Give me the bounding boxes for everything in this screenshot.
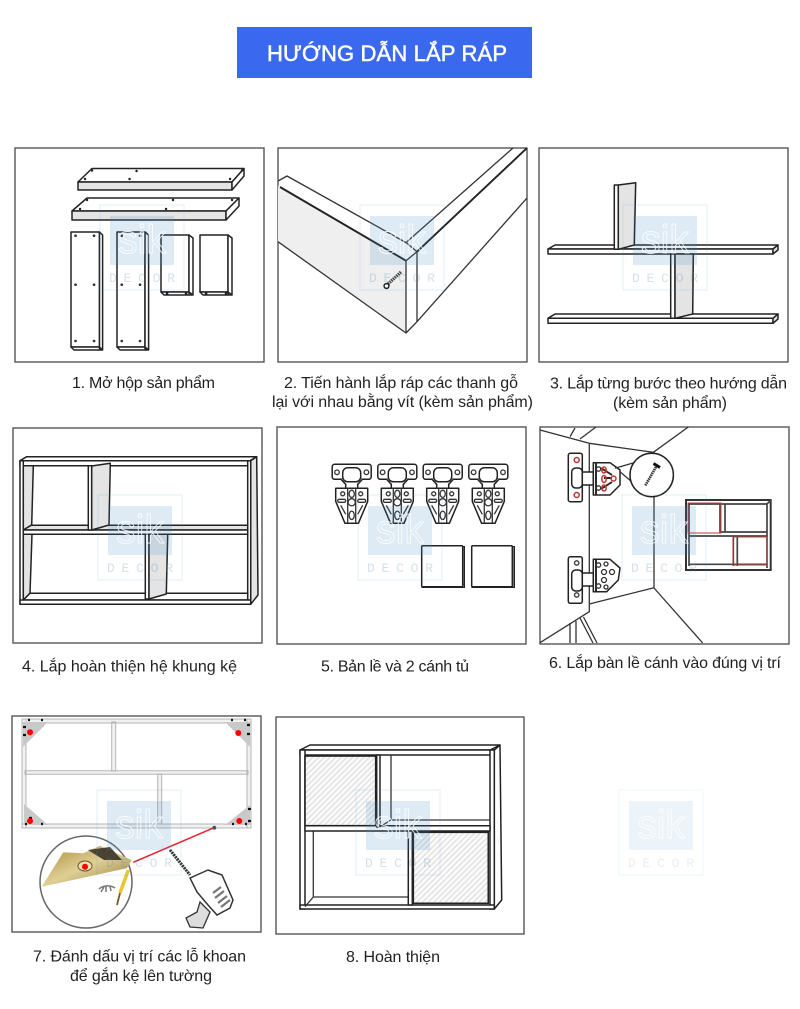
watermark <box>97 790 181 875</box>
watermark: sik <box>378 218 427 262</box>
lower upright <box>671 254 693 318</box>
caption 3: (kèm sản phẩm) <box>613 394 727 412</box>
faint watermark in empty area <box>619 790 703 875</box>
watermark <box>358 495 442 580</box>
watermark: sik <box>116 508 165 552</box>
red marks <box>27 729 242 824</box>
lower divider <box>145 534 168 599</box>
watermark <box>100 205 184 290</box>
faint watermark in empty area: DECOR <box>628 856 694 871</box>
watermark: DECOR <box>109 271 175 286</box>
watermark <box>356 790 440 875</box>
watermark: DECOR <box>367 561 433 576</box>
upper shelf <box>548 245 778 254</box>
watermark: DECOR <box>369 271 435 286</box>
panel: step 2 screw joint <box>278 148 527 362</box>
magnifier with screw <box>615 453 673 497</box>
room lines <box>540 427 703 643</box>
panel: step 8 finished <box>276 717 524 934</box>
watermark: sik <box>376 508 425 552</box>
back dividers <box>305 755 490 905</box>
caption 7: để gắn kệ lên tường <box>70 966 212 985</box>
red guide line <box>133 826 216 862</box>
caption 1: 1. Mở hộp sản phẩm <box>72 374 215 392</box>
panel: step 3 shelves <box>539 148 788 362</box>
middle shelf <box>23 525 248 534</box>
doors <box>422 546 514 588</box>
small shelf <box>686 500 771 570</box>
caption 4: 4. Lắp hoàn thiện hệ khung kệ <box>22 657 237 676</box>
panel: step 5 hinges and doors <box>277 427 526 644</box>
top plank <box>78 168 244 190</box>
outer frame <box>20 457 258 604</box>
caption 8: 8. Hoàn thiện <box>346 949 440 966</box>
finished frame <box>300 745 502 909</box>
upper upright <box>614 183 636 249</box>
panel: step 4 frame <box>13 428 262 643</box>
watermark: sik <box>640 508 689 552</box>
lower hinge <box>568 557 620 603</box>
panel: step 1 open box <box>15 148 264 362</box>
drill <box>170 850 233 928</box>
hinges <box>332 464 508 523</box>
watermark: DECOR <box>365 856 431 871</box>
caption 7: 7. Đánh dấu vị trí các lỗ khoan <box>33 947 246 966</box>
caption 3: 3. Lắp từng bước theo hướng dẫn <box>550 374 787 392</box>
watermark: sik <box>115 803 164 847</box>
watermark <box>360 205 444 290</box>
caption 2: 2. Tiến hành lắp ráp các thanh gỗ <box>284 373 518 392</box>
watermark <box>623 205 707 290</box>
watermark: DECOR <box>107 561 173 576</box>
faint watermark in empty area: sik <box>637 803 686 847</box>
watermark: sik <box>118 218 167 262</box>
watermark: sik <box>374 803 423 847</box>
second plank <box>72 198 239 220</box>
left board <box>278 176 417 333</box>
title banner: HƯỚNG DẪN LẮP RÁP <box>267 40 507 66</box>
watermark <box>622 495 706 580</box>
panel: step 6 mounting door hinges <box>540 427 789 644</box>
caption 6: 6. Lắp bàn lề cánh vào đúng vị trí <box>549 653 782 672</box>
right board <box>406 148 527 333</box>
caption 5: 5. Bản lề và 2 cánh tủ <box>321 659 469 676</box>
magnified bracket <box>40 836 132 928</box>
caption 2: lại với nhau bằng vít (kèm sản phẩm) <box>272 392 533 411</box>
short boards <box>161 235 232 295</box>
upper hinge <box>568 453 620 502</box>
screw <box>384 272 401 288</box>
panel: step 7 drill marks <box>12 716 261 932</box>
hatched door top <box>305 756 376 826</box>
tall boards <box>71 232 149 350</box>
watermark: DECOR <box>631 561 697 576</box>
watermark <box>98 495 182 580</box>
watermark: DECOR <box>632 271 698 286</box>
watermark: sik <box>641 218 690 262</box>
corner brackets <box>23 720 251 825</box>
watermark: DECOR <box>106 856 172 871</box>
lower shelf <box>548 314 778 323</box>
title banner <box>237 27 532 78</box>
hatched door bottom <box>413 832 488 903</box>
upper divider <box>88 463 110 530</box>
shelf outline <box>22 719 251 828</box>
